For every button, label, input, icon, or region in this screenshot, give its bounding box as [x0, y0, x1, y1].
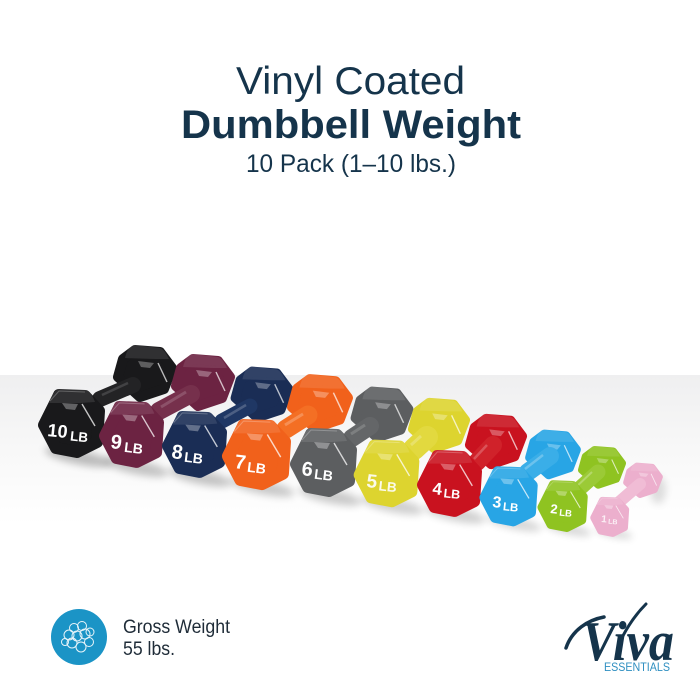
dumbbell: 10 lb black: 10 — [47, 420, 69, 442]
dumbbell: 7 lb orange — [228, 374, 348, 501]
dumbbell: 7 lb orange: 7 — [233, 451, 247, 474]
dumbbell: 6 lb gray — [296, 387, 408, 510]
dumbbell: 4 lb red: LB — [443, 486, 461, 502]
dumbbell: 1 lb pink — [594, 463, 666, 541]
dumbbell: 2 lb green: LB — [559, 508, 573, 520]
dumbbell row — [43, 345, 666, 541]
title line: Dumbbell Weight: Dumbbell Weight — [181, 103, 521, 147]
dumbbell: 4 lb red — [423, 414, 522, 527]
dumbbell: 7 lb orange: LB — [246, 459, 267, 477]
dumbbell: 8 lb navy: 8 — [170, 441, 184, 464]
dumbbell: 1 lb pink: 1 — [601, 514, 607, 525]
subtitle: 10 Pack (1–10 lbs.) — [246, 150, 456, 178]
dumbbell: 10 lb black — [43, 345, 172, 471]
dumbbell: 3 lb blue: LB — [502, 501, 519, 515]
dumbbell: 2 lb green — [542, 446, 622, 539]
dumbbell: 8 lb navy: LB — [183, 449, 204, 467]
dumbbell: 9 lb plum: LB — [123, 439, 144, 457]
gross weight text — [123, 617, 231, 660]
background floor band — [0, 375, 700, 525]
label: Gross Weight: Gross Weight — [123, 617, 231, 638]
dumbbell: 6 lb gray: LB — [313, 466, 334, 484]
dumbbell: 8 lb navy — [167, 367, 288, 491]
logo wordmark: Viva — [582, 611, 674, 673]
dumbbell: 6 lb gray: 6 — [300, 458, 314, 481]
dumbbell: 3 lb blue: 3 — [492, 494, 502, 512]
logo tagline: ESSENTIALS — [604, 662, 670, 674]
dumbbell: 2 lb green: 2 — [550, 501, 558, 517]
dumbbell: 10 lb black: LB — [69, 428, 89, 445]
dumbbell: 1 lb pink: LB — [608, 519, 618, 526]
dumbbell: 9 lb plum: 9 — [109, 431, 123, 454]
value: 55 lbs.: 55 lbs. — [123, 639, 175, 660]
dumbbell: 5 lb yellow: LB — [378, 478, 398, 495]
title line: Vinyl Coated: Vinyl Coated — [236, 60, 465, 103]
dumbbell: 5 lb yellow — [359, 398, 465, 519]
dumbbell: 9 lb plum — [102, 354, 230, 481]
title — [181, 60, 521, 178]
gross weight icon — [51, 609, 107, 665]
logo: Viva Essentials — [566, 604, 674, 674]
dumbbell: 5 lb yellow: 5 — [365, 471, 378, 493]
dumbbell: 3 lb blue — [485, 430, 576, 535]
dumbbell: 4 lb red: 4 — [432, 479, 443, 499]
